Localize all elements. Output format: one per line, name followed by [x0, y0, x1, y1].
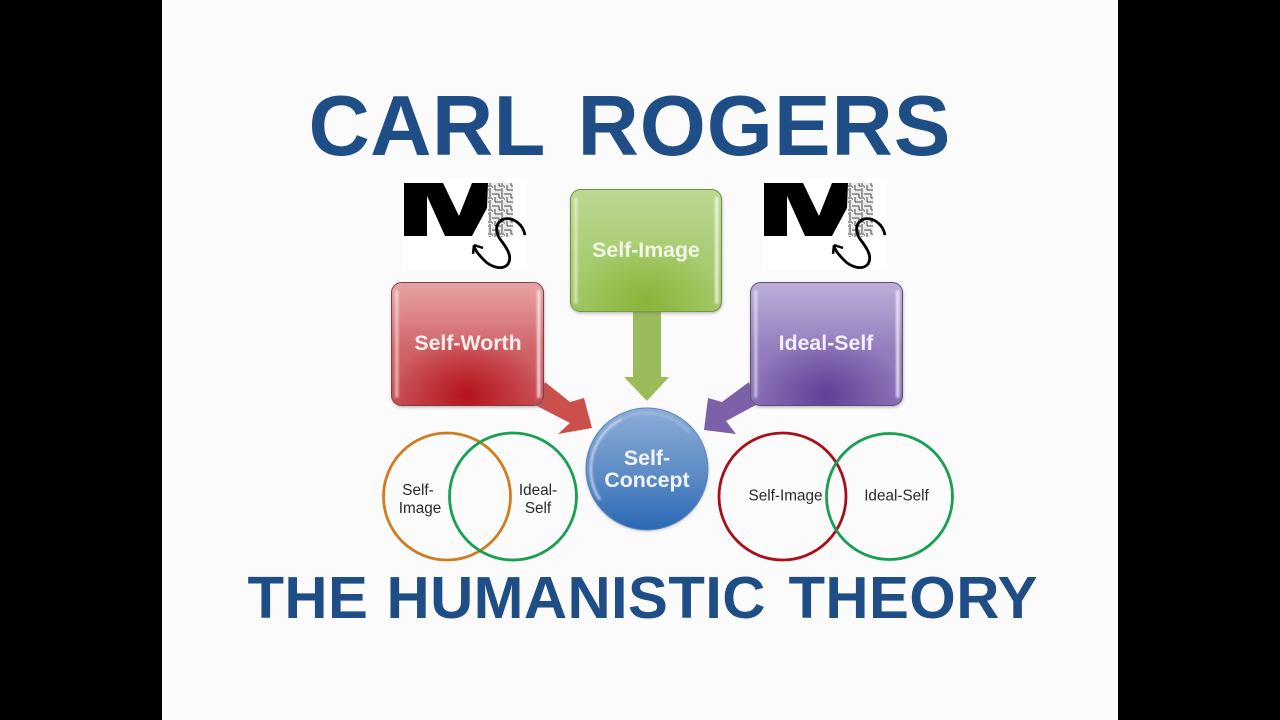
- box: self-image: [570, 190, 722, 313]
- arrow: ideal-self to self-concept: [704, 382, 756, 434]
- circle: self-concept: Concept: [604, 468, 690, 492]
- arrow: self-image to self-concept: [624, 312, 669, 401]
- box: self-worth: [392, 282, 544, 407]
- title: CARL: [308, 79, 544, 174]
- venn diagram: left: Self: [525, 500, 552, 517]
- venn diagram: right: [719, 433, 952, 560]
- venn diagram: right: Ideal-Self: [864, 488, 930, 504]
- venn diagram: left: [384, 433, 576, 560]
- circle: self-concept: [586, 408, 708, 531]
- venn diagram: left: Image: [399, 500, 441, 517]
- circle: self-concept: Self-: [624, 446, 670, 470]
- box: self-image: Self-Image: [592, 238, 700, 262]
- slide background: [162, 0, 1118, 720]
- venn diagram: left: Ideal-: [519, 482, 557, 499]
- box: ideal-self: [750, 282, 903, 407]
- arrow: self-worth to self-concept: [535, 382, 592, 434]
- subtitle: HUMANISTIC: [386, 564, 766, 631]
- box: self-worth: Self-Worth: [414, 331, 522, 355]
- venn diagram: right: Self-Image: [749, 488, 822, 504]
- venn diagram: left: Self-: [402, 482, 434, 499]
- box: ideal-self: Ideal-Self: [779, 331, 874, 355]
- subtitle: THEORY: [788, 564, 1038, 631]
- subtitle: THE: [248, 564, 368, 631]
- title: ROGERS: [578, 79, 951, 174]
- logo: right: [763, 178, 887, 270]
- logo: left: [403, 178, 527, 270]
